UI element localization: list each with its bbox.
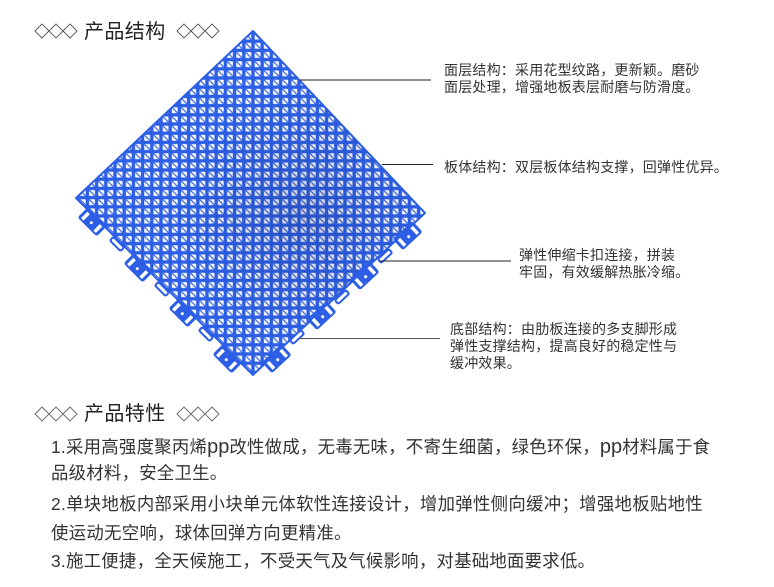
blue perforated tile body: [76, 31, 425, 375]
leader line: plate structure: [382, 164, 433, 166]
diamonds: left of structure heading: [35, 24, 77, 38]
callout: bottom structure: 底部结构：由肋板连接的多支脚形成: [450, 321, 677, 337]
leader line: surface layer: [300, 79, 431, 81]
callout: surface layer: 面层处理，增强地板表层耐磨与防滑度。: [444, 79, 700, 95]
callout: surface layer: 面层结构：采用花型纹路，更新颖。磨砂: [444, 62, 700, 78]
callout: bottom structure: 缓冲效果。: [450, 355, 521, 371]
interlocking tabs and slots on the tile edges: [78, 207, 423, 373]
leader line: elastic clip: [380, 260, 511, 262]
diamonds: right of features heading: [177, 407, 219, 421]
feature 3 text: 3.施工便捷，全天候施工，不受天气及气候影响，对基础地面要求低。: [51, 551, 595, 571]
feature 2 text: [51, 494, 703, 543]
feature 1 text: [51, 436, 710, 483]
diamonds: right of structure heading: [177, 24, 219, 38]
feature 1 text: 1.采用高强度聚丙烯pp改性做成，无毒无味，不寄生细菌，绿色环保，pp材料属于食: [51, 436, 710, 458]
leader line: bottom structure: [300, 338, 440, 340]
callout: elastic clip connection: 弹性伸缩卡扣连接，拼装: [519, 247, 675, 263]
feature 1 text: 品级材料，安全卫生。: [51, 463, 227, 483]
heading: product features: 产品特性: [84, 403, 166, 425]
tile shading: [76, 31, 425, 375]
callout: plate structure: 板体结构：双层板体结构支撑，回弹性优异。: [444, 159, 728, 175]
callout: bottom structure: [450, 321, 677, 371]
callout: bottom structure: 弹性支撑结构，提高良好的稳定性与: [450, 338, 677, 354]
feature 2 text: 使运动无空响，球体回弹方向更精准。: [51, 523, 352, 543]
diamonds: left of features heading: [35, 407, 77, 421]
callout: surface layer: [444, 62, 700, 95]
callout: elastic clip connection: [519, 247, 689, 280]
callout: elastic clip connection: 牢固，有效缓解热胀冷缩。: [519, 264, 689, 280]
heading: product structure: 产品结构: [84, 21, 166, 43]
feature 2 text: 2.单块地板内部采用小块单元体软性连接设计，增加弹性侧向缓冲；增强地板贴地性: [51, 494, 703, 514]
